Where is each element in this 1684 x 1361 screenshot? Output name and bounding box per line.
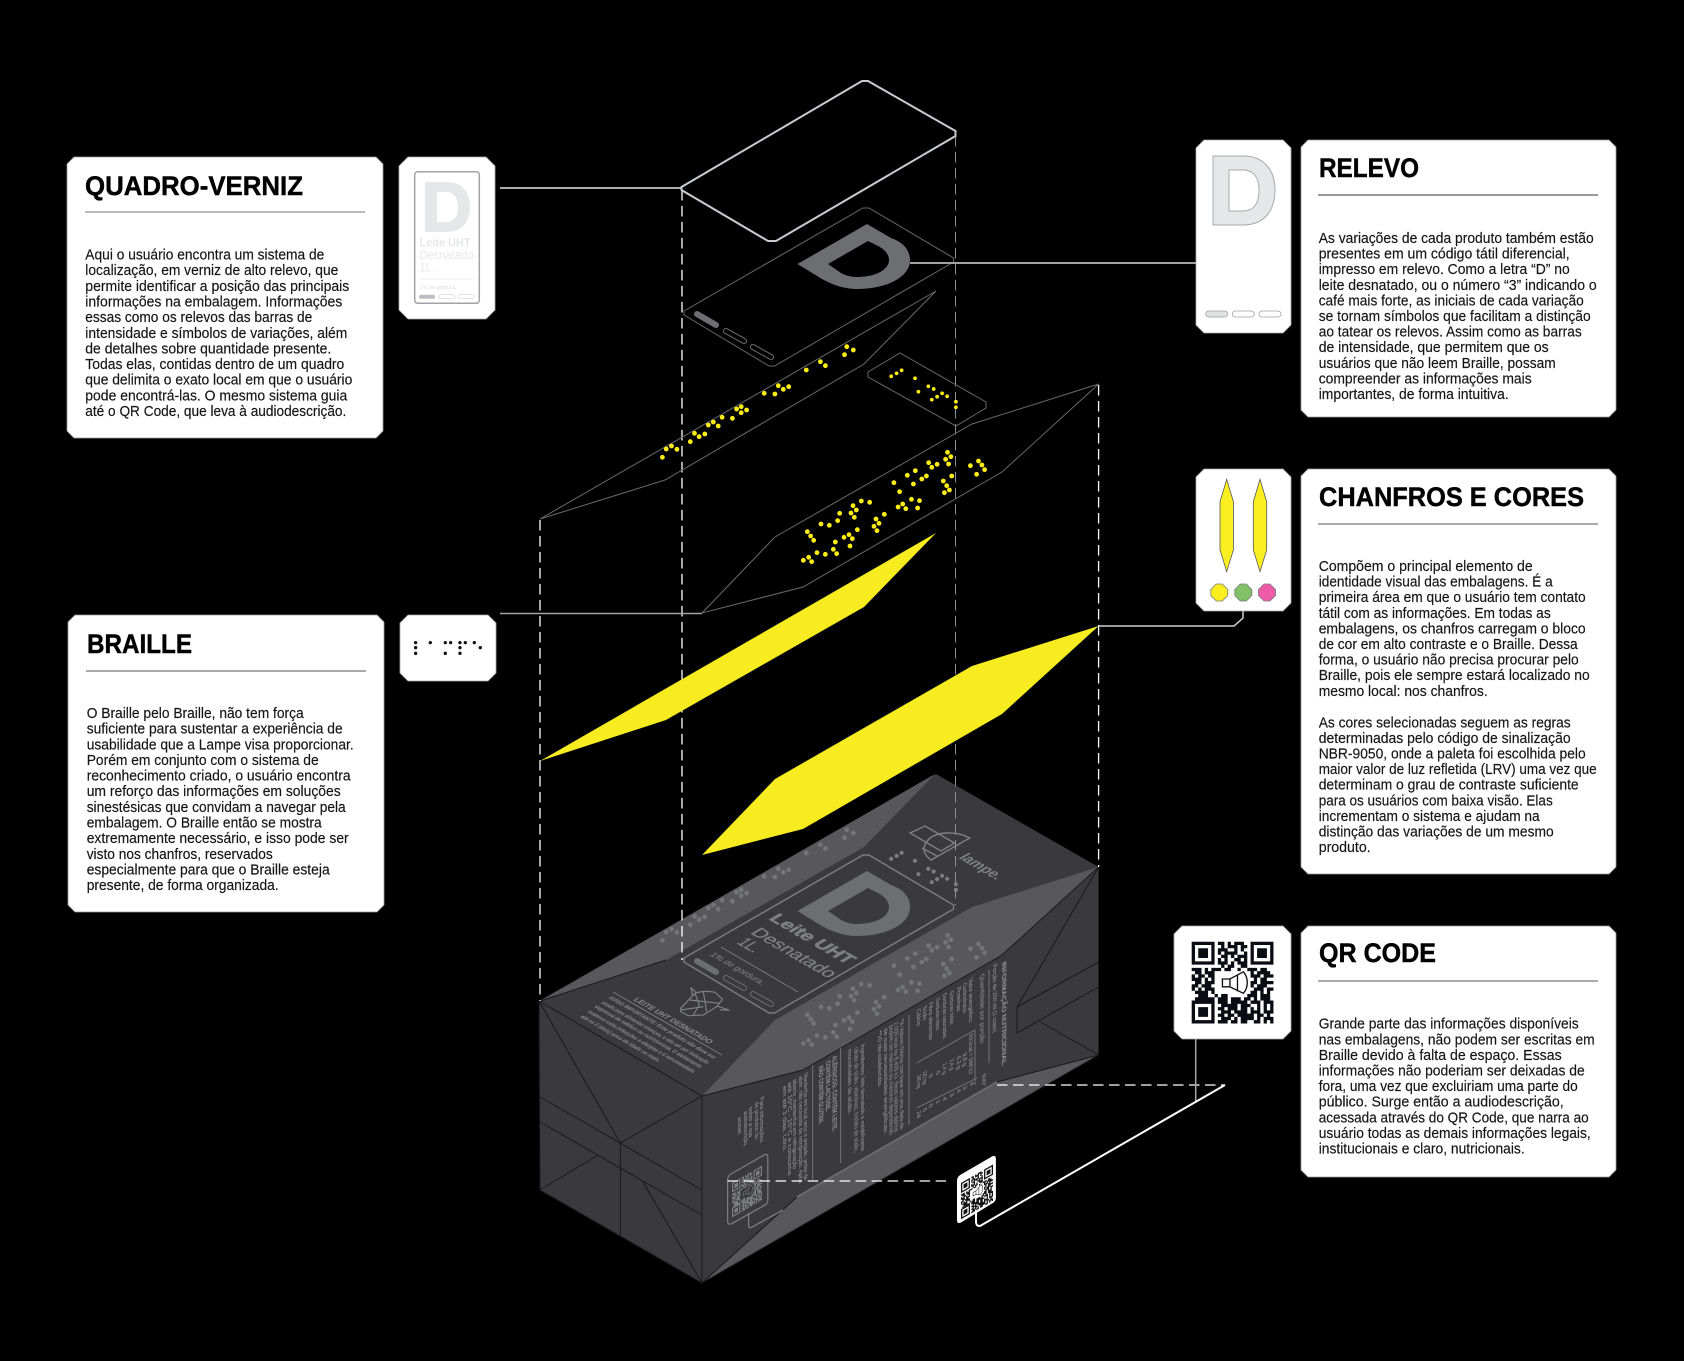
carton nutrition table and side text: Ingredientes: leite desnatado e estabilizante (859, 1042, 865, 1153)
connector lines (500, 188, 1243, 1226)
carton top face (539, 774, 1099, 1096)
icon: cow (681, 988, 729, 1016)
body text: usuários que não leem Braille, possam (1319, 356, 1556, 372)
carton nutrition table and side text: 0 (927, 1072, 933, 1080)
carton nutrition table and side text: Mantenha em local seco e arejado, antes de (802, 1071, 808, 1182)
carton nutrition table and side text: Carboidratos (961, 981, 967, 1015)
body text: usuário todas as demais informações legais, (1319, 1126, 1591, 1142)
body text: Grande parte das informações disponíveis (1319, 1017, 1579, 1033)
carton nutrition table and side text: 2.000 kcal ou 8.400 kJ. Seus valores diários (893, 1020, 899, 1134)
body text: para os usuários com baixa visão. Elas (1319, 793, 1553, 809)
carton nutrition table and side text: **VD não estabelecidos. (876, 1029, 882, 1089)
body text: um reforço das informações em soluções (87, 784, 341, 800)
body text: de detalhes sobre quantidade presente. (85, 341, 331, 357)
carton nutrition table and side text: 4 (955, 1087, 961, 1095)
carton warning text: expressa de médico ou nutricionista. O aleitamento (592, 1004, 704, 1069)
heading: RELEVO (1319, 153, 1419, 183)
carton nutrition table and side text: 83 kcal = 348 kJ (967, 1032, 973, 1076)
heading: CHANFROS E CORES (1319, 482, 1584, 512)
carton product name: 1L. (733, 935, 767, 955)
carton nutrition table and side text: até 10°C - 15°C e consuma (786, 1080, 793, 1178)
carton nutrition table and side text: Proteínas (955, 985, 961, 1013)
carton product name: Leite UHT (765, 911, 861, 967)
carton nutrition table and side text: 0 (934, 1069, 940, 1077)
body text: Compõem o principal elemento de (1319, 559, 1533, 575)
body text: institucionais e claro, nutricionais. (1319, 1142, 1525, 1158)
carton nutrition table and side text: 120 mg (921, 1069, 927, 1086)
strip outline (540, 291, 936, 519)
carton nutrition table and side text: 3 (961, 1084, 967, 1092)
carton nutrition table and side text: 3 (948, 1091, 954, 1099)
body text: até o QR Code, que leva à audiodescrição. (85, 404, 346, 420)
carton nutrition table and side text: de suas necessidades energéticas. (882, 1026, 888, 1136)
thumbnail: braille dots (400, 615, 496, 681)
carton nutrition table and side text: INFORMAÇÃO NUTRICIONAL (1000, 959, 1008, 1068)
body text: informações não poderiam ser deixadas de (1319, 1064, 1585, 1080)
body text: incrementam o sistema e ajudam na (1319, 809, 1540, 825)
body text: NBR-9050, onde a paleta foi escolhida pelo (1319, 746, 1586, 762)
carton warning text: usado para alimentar crianças, a não ser por indicação (599, 1000, 711, 1065)
body text: acessada através do QR Code, que narra ao (1319, 1110, 1589, 1126)
QR modules (961, 1165, 993, 1219)
body text: essas como os relevos das barras de (85, 310, 312, 326)
body text: ao tatear os relevos. Assim como as barras (1319, 325, 1582, 341)
body text: intensidade e símbolos de variações, além (85, 326, 347, 342)
carton lower chamfer (702, 1055, 1099, 1283)
small plate outline (868, 353, 986, 426)
thumbnail: chamfers and colours (1196, 469, 1291, 611)
body text: pode encontrá-las. O mesmo sistema guia (85, 388, 347, 404)
body text: nas embalagens, não podem ser escritas em (1319, 1032, 1595, 1048)
carton nutrition table and side text: *% Valores Diários com base em uma dieta de (898, 1017, 904, 1131)
carton nutrition table and side text: Para informações (758, 1095, 764, 1144)
body text: visto nos chanfros, reservados (87, 847, 273, 863)
carton nutrition table and side text: NÃO CONTÉM GLÚTEN. (817, 1063, 825, 1126)
panel: relevo (1301, 140, 1616, 417)
body text: extremamente necessário, e isso pode ser (87, 831, 349, 847)
carton intensity bars (697, 961, 771, 1004)
thumbnail: varnish frame: 1L. (420, 263, 434, 275)
carton nutrition table and side text: 9,8 g (961, 1051, 967, 1068)
carton QR frame (728, 1154, 783, 1228)
body text: público. Surge então a audiodescrição, (1319, 1095, 1564, 1111)
carton nutrition table and side text: citrato de sódio, vitaminas, fosfato de sódio, (853, 1045, 859, 1154)
body text: permite identificar a posição das principais (85, 279, 349, 295)
carton nutrition table and side text: ALÉRGICOS: CONTÉM LEITE. (831, 1053, 839, 1133)
carton nutrition table and side text: CONTÉM LACTOSE. (824, 1058, 832, 1113)
layer: right braille strip (702, 384, 1099, 613)
right strip outline (702, 384, 1099, 613)
thumbnail: QR code (1174, 926, 1291, 1039)
body text: leite desnatado, ou o número “3” indicando o (1319, 278, 1597, 294)
carton product name: 1% de gordura. (708, 951, 768, 986)
body text: primeira área em que o usuário tem contato (1319, 590, 1586, 606)
body text (87, 706, 354, 894)
heading: BRAILLE (87, 629, 192, 659)
carton product name (708, 911, 861, 986)
carton nutrition table and side text: sobre a sua (747, 1105, 753, 1139)
body text: tátil com as informações. Em todas as (1319, 606, 1551, 622)
body text (1319, 1017, 1595, 1158)
body text: Aqui o usuário encontra um sistema de (85, 248, 324, 264)
dashed guide lines (540, 136, 1225, 1181)
panel: qr code (1301, 926, 1616, 1177)
body text: fora, uma vez que excluiriam uma parte do (1319, 1079, 1578, 1095)
body text: produto. (1319, 840, 1371, 856)
body text: determinam o grau de contraste suficiente (1319, 778, 1579, 794)
body text: localização, em verniz de alto relevo, que (85, 263, 338, 279)
carton warning text: até os 2 (dois) anos de idade ou mais. (578, 1014, 662, 1063)
panel: quadro-verniz (67, 157, 383, 438)
body text: distinção das variações de um mesmo (1319, 824, 1554, 840)
heading: QR CODE (1319, 938, 1436, 968)
body text: As cores selecionadas seguem as regras (1319, 715, 1571, 731)
carton varnish frame (684, 855, 954, 1013)
carton nutrition table and side text: 1 (934, 1098, 940, 1106)
body text: compreender as informações mais (1319, 371, 1532, 387)
body text: café mais forte, as iniciais de cada variação (1319, 293, 1584, 309)
carton nutrition table and side text: 6,2 g (955, 1054, 961, 1071)
carton nutrition table and side text: acesse. (736, 1115, 742, 1137)
carton nutrition table and side text: 4 (968, 1080, 974, 1088)
carton warning text (578, 992, 722, 1074)
carton warning text: materno evita infecções e alergias e é recomendado (585, 1009, 697, 1074)
QR card (958, 1156, 995, 1223)
carton braille embossing (660, 828, 987, 1047)
body text: que delimita o exato local em que o usuário (85, 373, 352, 389)
thumbnail: varnish frame: Leite UHT (420, 238, 470, 250)
body text: mesmo local: nos chanfros. (1319, 684, 1488, 700)
carton fold lines (539, 867, 1099, 1283)
carton warning text: AVISO IMPORTANTE: Este produto não deve ser (606, 995, 718, 1060)
body text: As variações de cada produto também estão (1319, 231, 1594, 247)
thumbnail: varnish frame: Desnatado (420, 250, 474, 262)
body text: Todas elas, contidas dentro de um quadro (85, 357, 344, 373)
carton nutrition table and side text: Gorduras trans (934, 996, 940, 1032)
body text: embalagem. O Braille então se mostra (87, 816, 322, 832)
layer: loose QR code (958, 1156, 995, 1223)
body text: se tornam símbolos que facilitam a distinção (1319, 309, 1591, 325)
carton nutrition table and side text: audiodescrição, (742, 1109, 748, 1148)
body text: impresso em relevo. Como a letra “D” no (1319, 262, 1570, 278)
thumbnail: relief D (1196, 140, 1291, 333)
body text: suficiente para sustentar a experiência de (87, 722, 343, 738)
body text (1319, 559, 1597, 856)
carton nutrition table and side text: %VD* (980, 1072, 986, 1088)
body text: reconhecimento criado, o usuário encontra (87, 769, 351, 785)
body text: forma, o usuário não precisa procurar pelo (1319, 653, 1579, 669)
layer: yellow chamfer right (702, 626, 1099, 855)
carton nutrition table and side text: 1,4 g (941, 1061, 947, 1076)
carton nutrition table and side text: Valor energético (967, 976, 973, 1024)
carton nutrition table and side text: abrir, não necessita de refrigeração. Após (797, 1074, 803, 1185)
panel: chanfros e cores (1301, 469, 1616, 874)
carton front face (702, 867, 1099, 1283)
carton nutrition table and side text: 240 mg (915, 1073, 921, 1090)
body text (1319, 231, 1597, 403)
carton letter D (798, 871, 910, 936)
body text: embalagens, os chanfros carregam o bloco (1319, 621, 1586, 637)
carton product name: Desnatado (746, 925, 842, 981)
milk carton box (539, 774, 1099, 1283)
logo: lampe (910, 826, 1007, 882)
thumbnail: varnish frame (399, 157, 495, 319)
carton warning text: LEITE UHT DESNATADO (631, 996, 715, 1045)
carton nutrition table and side text: Sódio (921, 1004, 927, 1022)
carton nutrition table and side text: aberto, mantenha em refrigeração (791, 1077, 797, 1171)
heading: QUADRO-VERNIZ (85, 171, 303, 201)
body text: presentes em um código tátil diferencial, (1319, 247, 1570, 263)
body text: maior valor de luz refletida (LRV) uma vez que (1319, 762, 1597, 778)
carton nutrition table and side text: Porção de 200 ml (1 copo) (991, 962, 997, 1034)
body text: sinestésicas que convidam a navegar pela (87, 800, 346, 816)
body text: Porém em conjunto com o sistema de (87, 753, 319, 769)
carton nutrition table and side text: 0 (927, 1102, 933, 1110)
carton nutrition table and side text: 6 (921, 1106, 927, 1114)
body text: determinadas pelo código de sinalização (1319, 731, 1571, 747)
body text: Braille devido à falta de espaço. Essas (1319, 1048, 1562, 1064)
carton nutrition table and side text (736, 959, 1008, 1185)
right strip dots (801, 450, 987, 564)
plate outline (684, 208, 954, 366)
body text: de cor em alto contraste e o Braille. Dessa (1319, 637, 1578, 653)
carton nutrition table and side text: 2,4 g (948, 1057, 954, 1072)
carton front chamfer (702, 867, 1099, 1096)
carton top chamfer (540, 774, 935, 1001)
body text: presente, de forma organizada. (87, 878, 279, 894)
carton nutrition table and side text: Gorduras totais (948, 989, 954, 1026)
body text: usabilidade que a Lampe visa proporcionar. (87, 737, 354, 753)
panel: braille (68, 615, 384, 912)
carton left end face (539, 1001, 702, 1283)
carton nutrition table and side text: Fibra alimentar (927, 1000, 933, 1043)
carton nutrition table and side text: em até 3 dias. Litro. (781, 1084, 787, 1153)
carton nutrition table and side text: 4 (941, 1095, 947, 1103)
carton nutrition table and side text: podem ser maiores ou menores dependendo (888, 1023, 894, 1137)
body text: de intensidade, que permitem que os (1319, 340, 1549, 356)
body text: Braille, pois ele sempre estará localizado no (1319, 668, 1590, 684)
layer: small braille plate (868, 353, 986, 426)
layer: yellow chamfer left (540, 533, 936, 761)
body text (85, 248, 352, 420)
thumbnail: varnish frame: 1% de gordura. (420, 285, 457, 291)
body text: importantes, de forma intuitiva. (1319, 387, 1509, 403)
carton nutrition table and side text: 24 (915, 1109, 921, 1121)
carton nutrition table and side text: de produtos ou (753, 1100, 759, 1141)
body text: O Braille pelo Braille, não tem força (87, 706, 304, 722)
relief intensity bars (697, 314, 771, 357)
carton QR code (732, 1166, 762, 1217)
carton nutrition table and side text: monofosfato de sódio. (846, 1047, 852, 1116)
carton nutrition table and side text: Gorduras saturadas (941, 991, 947, 1040)
relief letter D (798, 224, 910, 289)
body text: especialmente para que o Braille esteja (87, 862, 330, 878)
strip dots (660, 345, 855, 459)
layer: relief plate (684, 208, 954, 366)
logo: lampe: lampe. (955, 851, 1007, 882)
carton nutrition table and side text: Quantidade por porção (979, 972, 985, 1045)
layer: left braille strip (540, 291, 936, 519)
small plate dots (890, 369, 958, 409)
carton nutrition table and side text: Cálcio (915, 1007, 921, 1028)
layer: top varnish plate (682, 81, 956, 241)
body text: informações na embalagem. Informações (85, 294, 342, 310)
body text: identidade visual das embalagens. É a (1319, 574, 1553, 591)
